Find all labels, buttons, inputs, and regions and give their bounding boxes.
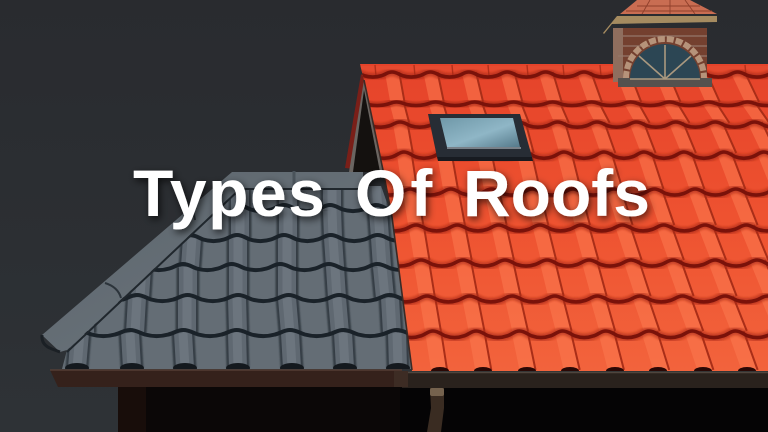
gable opening	[345, 74, 385, 172]
grey tile ribs	[77, 185, 398, 368]
house wall below gutter	[118, 386, 768, 432]
red tile bottom arches	[431, 367, 756, 371]
red tile courses	[315, 72, 768, 370]
skylight	[428, 114, 533, 161]
ridge tiles	[360, 65, 768, 76]
hip ridge roll	[42, 171, 363, 352]
chimney trim	[603, 16, 717, 34]
title: Roofs	[463, 156, 650, 230]
downspout	[427, 388, 444, 432]
chimney	[603, 0, 717, 87]
title: Of	[355, 156, 436, 230]
gutter	[50, 370, 768, 388]
arch of bricks	[626, 39, 704, 78]
red tiled roof	[360, 64, 768, 371]
grey tile course lines	[84, 203, 406, 338]
title: Types	[133, 156, 326, 230]
chimney brick body	[613, 28, 707, 82]
grey tiled roof	[62, 186, 411, 369]
grey tile bottom arches	[65, 363, 410, 369]
chimney cap roof	[620, 0, 717, 14]
chimney base strip	[618, 78, 712, 87]
fan window	[630, 44, 700, 79]
